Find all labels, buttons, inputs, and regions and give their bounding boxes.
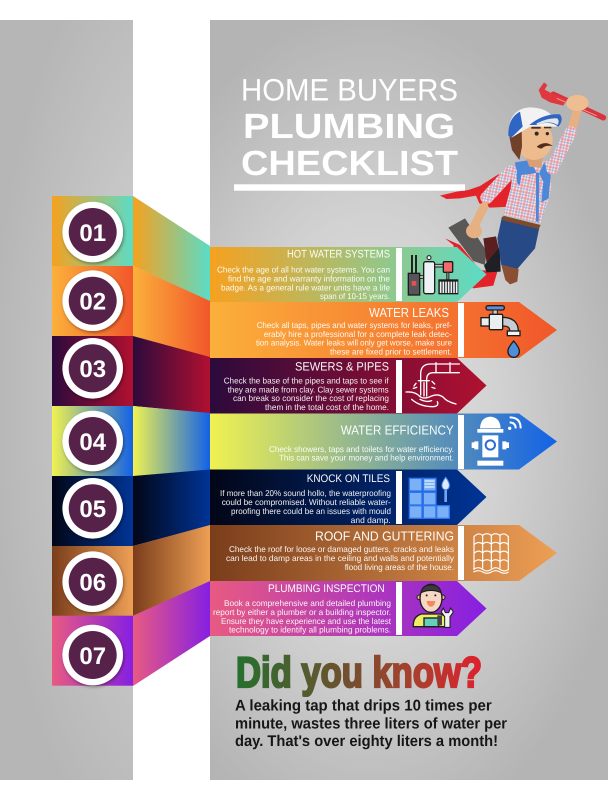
- text block: did you know fact: [235, 698, 507, 750]
- step 3: sewers and pipes: them in the total cost of the home.: [265, 402, 389, 412]
- step 2: water leaks: tion analysis. Water leaks will only get worse, make sure: [256, 338, 452, 348]
- step 5: knock on tiles: could be compromised. Without reliable water-: [222, 497, 391, 507]
- title: PLUMBING: [243, 107, 455, 146]
- jeans: [497, 217, 539, 269]
- step 1: hot water systems: Check the age of all hot water systems. You can: [217, 264, 390, 274]
- step 2: water leaks: these are fixed prior to settlement.: [330, 347, 452, 357]
- badge 04: 04: [79, 429, 107, 456]
- badge 02: [62, 270, 123, 331]
- connector ribbons: [133, 196, 210, 686]
- step 6: roof and guttering: can lead to damp areas in the ceiling and walls and potentially: [226, 553, 455, 563]
- step 7: plumbing inspection: PLUMBING INSPECTION: [268, 583, 385, 595]
- lower arm: [474, 207, 484, 227]
- raised arm: [572, 110, 577, 130]
- step 7: plumbing inspection: Ensure they have experience and use the latest: [221, 616, 392, 626]
- step 5: knock on tiles: and damp.: [351, 515, 391, 525]
- icon: leaking sewer pipe: [406, 363, 459, 407]
- text block: did you know fact: minute, wastes three liters of water per: [235, 715, 507, 732]
- badge 01: 01: [79, 220, 106, 247]
- wrench: [539, 82, 603, 118]
- step 1: hot water systems: find the age and warranty information on the: [228, 274, 390, 284]
- title underline: [234, 184, 465, 191]
- icon: plumber avatar: [413, 584, 453, 627]
- title: [241, 72, 458, 183]
- title: CHECKLIST: [241, 144, 458, 183]
- icon: roof tiles: [473, 534, 509, 573]
- step 3: sewers and pipes: Check the base of the pipes and taps to see if: [224, 376, 389, 386]
- step 7: plumbing inspection: technology to identify all plumbing problems.: [229, 625, 391, 635]
- badge 03: 03: [79, 356, 106, 383]
- text block: did you know fact: day. That's over eighty liters a month!: [235, 733, 498, 750]
- step 3: sewers and pipes: can break so consider the cost of replacing: [233, 393, 389, 403]
- step 5: knock on tiles: If more than 20% sound hollo, the waterproofing: [220, 488, 391, 498]
- title: HOME BUYERS: [241, 72, 458, 108]
- sleeves: [552, 132, 571, 168]
- head: [515, 120, 553, 160]
- step 6: roof and guttering: ROOF AND GUTTERING: [315, 528, 454, 544]
- step 1: hot water systems: span of 10-15 years.: [320, 291, 390, 301]
- step 5: knock on tiles: proofing there could be an issues with mould: [231, 506, 391, 516]
- eyes: [531, 127, 551, 136]
- text block: did you know fact: A leaking tap that drips 10 times per: [235, 698, 492, 715]
- badge 05: [62, 478, 123, 539]
- badge 07: 07: [79, 643, 106, 670]
- illustration: flying plumber: [440, 82, 603, 288]
- step 1: hot water systems: HOT WATER SYSTEMS: [287, 248, 390, 260]
- step 5: knock on tiles: [210, 470, 486, 525]
- belt: [503, 216, 541, 229]
- badge 05: 05: [79, 496, 106, 523]
- cap: [508, 107, 562, 138]
- heading: did you know: Did you know?: [236, 649, 482, 697]
- badge 06: 06: [79, 570, 106, 596]
- fist: [566, 95, 589, 111]
- step 1: hot water systems: [210, 247, 486, 302]
- step 6: roof and guttering: flood living areas of the house.: [345, 562, 454, 572]
- hair: [509, 128, 522, 160]
- icon: water heater: [408, 255, 458, 295]
- moustache: [537, 143, 553, 148]
- badge 04: [62, 411, 123, 471]
- badge 07: [62, 625, 123, 685]
- step 4: water efficiency: [210, 414, 557, 470]
- cape: [440, 174, 515, 288]
- left gray column: [0, 20, 133, 780]
- step 4: water efficiency: Check showers, taps and toilets for water efficiency.: [269, 444, 454, 454]
- left sleeve: [487, 172, 511, 198]
- step 2: water leaks: Check all taps, pipes and water systems for leaks, pref-: [257, 320, 452, 330]
- icon: tiles and brush: [409, 477, 449, 518]
- overall straps: [515, 160, 551, 222]
- number badges: [62, 202, 123, 685]
- right gray panel: [210, 20, 608, 780]
- badge 01: [62, 202, 123, 262]
- shirt: [503, 161, 552, 224]
- step 1: hot water systems: badge. As a general rule water units have a life: [221, 282, 390, 292]
- step 4: water efficiency: WATER EFFICIENCY: [341, 422, 454, 438]
- hand: [466, 224, 482, 238]
- step 3: sewers and pipes: SEWERS & PIPES: [295, 360, 389, 374]
- icon: tap and drop: [481, 306, 520, 357]
- numbered blocks: [52, 196, 133, 686]
- toolbox: [448, 218, 501, 272]
- step 6: roof and guttering: [210, 525, 557, 581]
- badge 02: 02: [79, 288, 106, 316]
- step 7: plumbing inspection: Book a comprehensive and detailed plumbing: [224, 598, 391, 608]
- step 3: sewers and pipes: [210, 358, 486, 414]
- step 4: water efficiency: This can save your money and help environment.: [279, 453, 454, 463]
- step 2: water leaks: WATER LEAKS: [369, 305, 449, 320]
- badge 03: [62, 338, 123, 399]
- boot: [501, 265, 519, 284]
- step 7: plumbing inspection: report by either a plumber or a building inspector.: [213, 607, 391, 617]
- neck: [525, 150, 543, 168]
- step 2: water leaks: [210, 302, 557, 358]
- step 2: water leaks: erably hire a professional for a complete leak detec-: [264, 329, 452, 339]
- icon: hydrant with signal: [472, 417, 521, 466]
- step 7: plumbing inspection: [210, 581, 486, 636]
- step 3: sewers and pipes: they are made from clay. Clay sewer systems: [228, 384, 389, 394]
- step 6: roof and guttering: Check the roof for loose or damaged gutters, cracks and leaks: [229, 544, 454, 554]
- step 5: knock on tiles: KNOCK ON TILES: [307, 473, 390, 485]
- badge 06: [62, 551, 123, 612]
